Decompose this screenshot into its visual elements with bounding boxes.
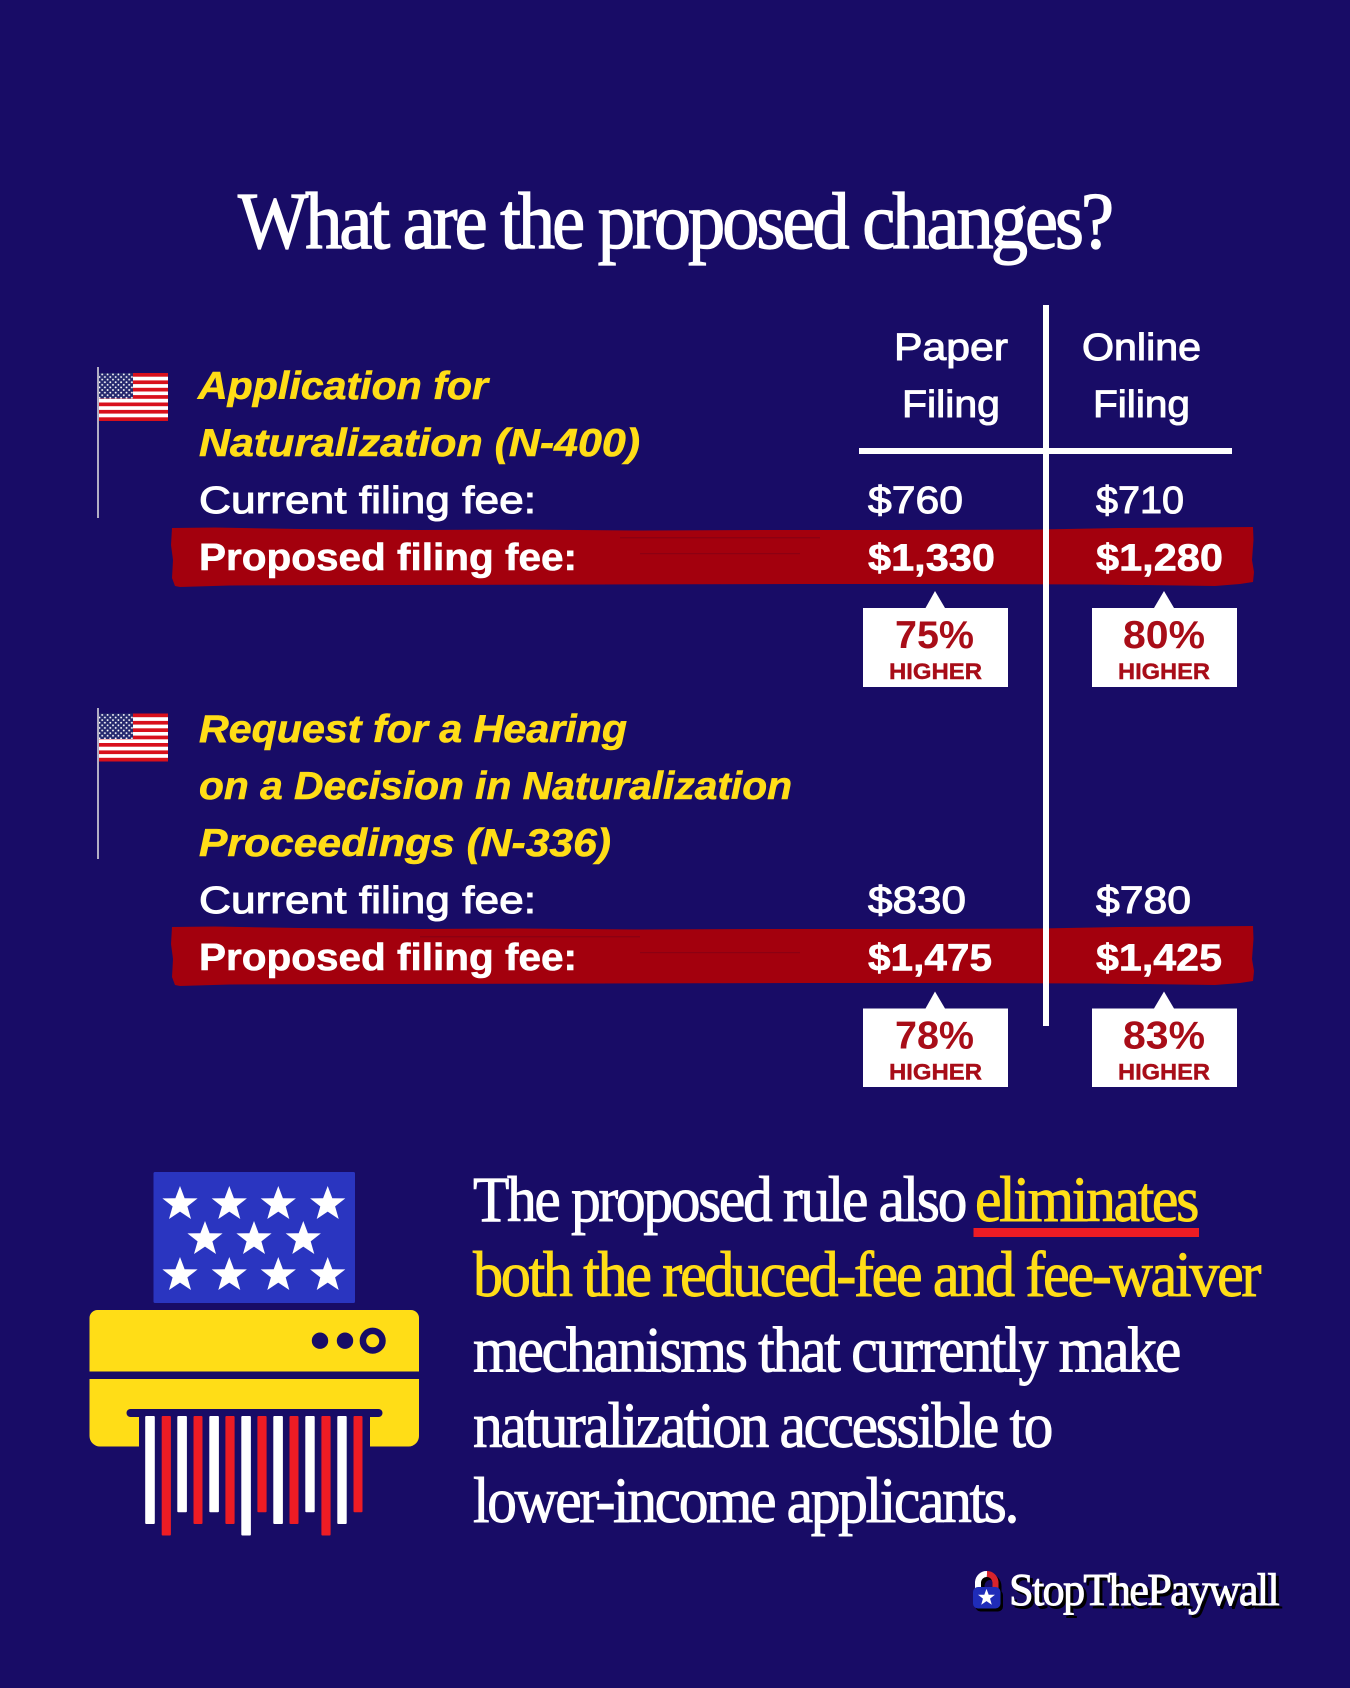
callout: online 80% higher: 80% xyxy=(1123,614,1205,657)
logo: StopThePaywall xyxy=(973,1564,1279,1615)
proposed fee row: Proposed filing fee: xyxy=(199,537,577,579)
current fee row: $760 xyxy=(868,480,963,522)
form heading: on a Decision in Naturalization xyxy=(199,765,792,808)
form heading xyxy=(197,365,640,465)
current fee row: Current filing fee: xyxy=(199,880,536,922)
icon: shredder destroying flag xyxy=(90,1172,419,1536)
body text: lower-income applicants. xyxy=(473,1465,1017,1537)
table header rule xyxy=(859,448,1232,454)
proposed fee row: $1,330 xyxy=(868,538,995,580)
panel: N-400 fees xyxy=(97,365,1237,687)
column heading: paper filing: Paper xyxy=(894,327,1008,369)
form heading: Request for a Hearing xyxy=(199,708,627,751)
shredder body xyxy=(90,1310,419,1446)
callout: online 80% higher: HIGHER xyxy=(1118,659,1210,684)
form heading xyxy=(199,708,792,865)
panel: N-336 fees xyxy=(97,708,1237,1087)
current fee row: $830 xyxy=(868,880,966,922)
callout: online 80% higher xyxy=(1092,591,1237,687)
callout: paper 78% higher: 78% xyxy=(895,1014,974,1058)
callout: online 83% higher xyxy=(1092,992,1237,1087)
icon: american flag xyxy=(97,708,168,859)
proposed fee row: $1,280 xyxy=(1096,538,1223,580)
shredded flag strips xyxy=(145,1416,362,1536)
proposed fee row xyxy=(199,937,1222,980)
callout: paper 75% higher: 75% xyxy=(895,614,974,657)
red highlight bar: N-400 proposed fee xyxy=(171,527,1254,587)
proposed fee row xyxy=(199,537,1223,580)
proposed fee row: Proposed filing fee: xyxy=(199,937,577,979)
proposed fee row: $1,475 xyxy=(868,938,992,980)
callout: online 83% higher: 83% xyxy=(1123,1014,1205,1058)
column heading: paper filing xyxy=(894,327,1008,426)
callout: paper 78% higher xyxy=(863,992,1008,1087)
body text: mechanisms that currently make xyxy=(473,1314,1180,1386)
body text: eliminates xyxy=(975,1164,1197,1236)
current fee row: Current filing fee: xyxy=(199,480,536,522)
column heading: online filing: Online xyxy=(1082,327,1201,369)
body text: naturalization accessible to xyxy=(473,1390,1052,1462)
flag canton paper xyxy=(154,1172,355,1303)
callout: paper 75% higher: HIGHER xyxy=(889,659,982,684)
body text xyxy=(473,1164,1262,1537)
table column divider xyxy=(1043,305,1049,1026)
form heading: Proceedings (N-336) xyxy=(199,822,611,865)
current fee row: $780 xyxy=(1096,880,1191,922)
column heading: online filing xyxy=(1082,327,1201,426)
icon: american flag xyxy=(97,367,168,518)
current fee row xyxy=(199,480,1184,522)
underline: eliminates xyxy=(974,1228,1199,1237)
form heading: Application for xyxy=(197,365,490,408)
current fee row xyxy=(199,880,1191,922)
callout: online 83% higher: HIGHER xyxy=(1118,1060,1210,1084)
red highlight bar: N-336 proposed fee xyxy=(171,926,1254,986)
proposed fee row: $1,425 xyxy=(1096,938,1222,980)
callout: paper 75% higher xyxy=(863,591,1008,687)
body text: The proposed rule also xyxy=(473,1164,966,1236)
column heading: online filing: Filing xyxy=(1093,384,1190,426)
wordmark: StopThePaywall xyxy=(1009,1564,1279,1615)
icon: padlock xyxy=(973,1574,1003,1612)
column heading: paper filing: Filing xyxy=(902,384,1000,426)
title: What are the proposed changes? xyxy=(238,178,1112,266)
current fee row: $710 xyxy=(1096,480,1184,522)
callout: paper 78% higher: HIGHER xyxy=(889,1060,982,1084)
form heading: Naturalization (N-400) xyxy=(199,422,640,465)
body text: both the reduced-fee and fee-waiver xyxy=(473,1239,1262,1311)
